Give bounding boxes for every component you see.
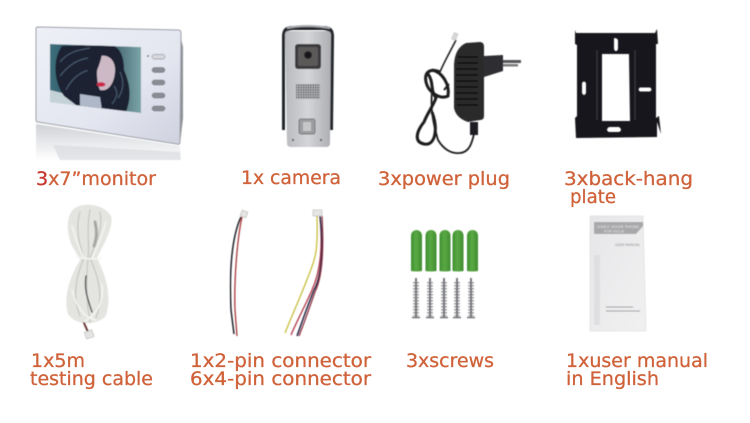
- label: back-hang plate: 3xback-hang: [564, 168, 693, 190]
- adapter body: [454, 42, 484, 122]
- wires: [230, 217, 242, 336]
- cable plug: [84, 330, 94, 339]
- label: user manual: [566, 350, 708, 390]
- plug: [313, 210, 322, 216]
- strain relief: [470, 122, 478, 135]
- label: screws: 3xscrews: [406, 350, 494, 372]
- manual title band: [594, 222, 643, 234]
- camera hood top sheen: [287, 26, 330, 28]
- monitor reflection: [36, 124, 181, 160]
- camera faceplate: [285, 31, 331, 147]
- icon: monitor: [36, 27, 183, 160]
- manual title text: VIDEO DOOR PHONE: [597, 225, 639, 229]
- power cord: [417, 40, 474, 153]
- monitor indicator dot: [147, 55, 149, 57]
- icon: 4-pin connector wires: [285, 210, 323, 336]
- icon: testing cable coil: [66, 205, 112, 339]
- monitor buttons: [152, 54, 165, 111]
- manual title text line two: FOR VILLA: [604, 230, 625, 234]
- icon: door camera: [282, 26, 334, 147]
- manual cover: [590, 216, 646, 331]
- label: power plug: 3xpower plug: [378, 168, 510, 190]
- label: testing cable: [30, 350, 153, 390]
- screws: [416, 282, 471, 316]
- camera screws: [292, 139, 322, 141]
- plate embossed ribs: [597, 50, 635, 120]
- cable tie: [76, 257, 102, 259]
- label: connectors: 1x2-pin connector: [190, 350, 371, 372]
- label: monitor: 3x7”monitor: [36, 168, 156, 190]
- label: testing cable: 1x5m: [31, 350, 85, 372]
- manual subtitle: USER MANUAL: [615, 243, 640, 247]
- label: testing cable: testing cable: [30, 368, 153, 390]
- icon: power plug: [417, 32, 521, 153]
- cable coil silhouette: [66, 205, 112, 323]
- plug head: [484, 55, 503, 77]
- monitor screen: [50, 44, 141, 113]
- camera speaker grille: [296, 84, 320, 99]
- icon: user manual: [590, 216, 646, 331]
- cable strands: [72, 210, 106, 332]
- label: connectors: [190, 350, 371, 390]
- camera rain hood: [282, 26, 334, 130]
- icon: 2-pin connector wires: [230, 210, 248, 336]
- icon: wall anchors and screws: [411, 230, 478, 318]
- camera lens: [295, 44, 321, 69]
- camera call button: [299, 119, 315, 134]
- label: connectors: 6x4-pin connector: [190, 368, 371, 390]
- adapter vent slots: [456, 57, 478, 105]
- manual spine shadow: [594, 255, 600, 325]
- label: back-hang plate: plate: [570, 186, 616, 208]
- screw shafts: [416, 278, 471, 317]
- screw heads: [412, 316, 475, 318]
- monitor body: [36, 27, 181, 144]
- label: back-hang plate: [564, 168, 693, 208]
- label: camera: 1x camera: [241, 167, 341, 189]
- icon: back-hang plate: [575, 29, 661, 138]
- cord connector: [451, 32, 458, 40]
- label: user manual: in English: [566, 368, 659, 390]
- monitor side edge: [179, 30, 183, 144]
- wires: [285, 216, 323, 336]
- green anchors: [411, 230, 478, 272]
- label: user manual: 1xuser manual: [566, 350, 708, 372]
- plug: [240, 210, 248, 218]
- manual footer lines: [606, 307, 640, 311]
- plug pins: [503, 60, 521, 66]
